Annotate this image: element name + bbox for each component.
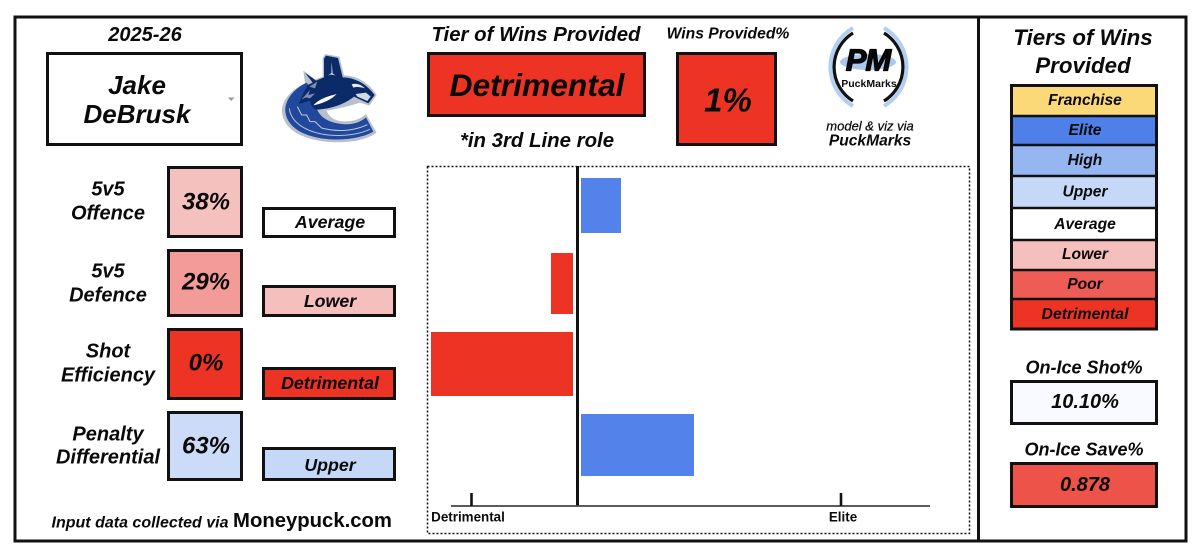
heading: tiers of wins provided: Tiers of Wins — [1013, 25, 1153, 50]
value axis — [451, 505, 930, 507]
metric row: shot efficiency — [61, 330, 394, 398]
credit: model and viz — [826, 118, 914, 150]
bar: shot efficiency — [431, 332, 573, 396]
metric row: penalty differential: Upper — [304, 455, 357, 475]
metric row: shot efficiency: Detrimental — [281, 373, 380, 393]
tier badge: detrimental: Detrimental — [450, 67, 626, 103]
title: tier of wins provided: Tier of Wins Provided — [431, 24, 641, 46]
player selector: DeBrusk — [84, 99, 192, 129]
bar: 5v5 offence — [581, 178, 621, 233]
legend: tiers: Detrimental — [1042, 306, 1129, 323]
metric row: 5v5 offence — [71, 168, 394, 236]
metric row: 5v5 defence: Defence — [69, 284, 147, 306]
legend: tiers: High — [1068, 152, 1102, 169]
icon: PuckMarks logo — [830, 28, 907, 106]
metric row: 5v5 defence — [69, 250, 394, 316]
credit: model and viz: PuckMarks — [829, 132, 911, 150]
bar: penalty differential — [581, 414, 694, 476]
heading: tiers of wins provided — [1013, 25, 1153, 78]
title: wins provided percent: Wins Provided% — [667, 26, 789, 42]
metric row: penalty differential — [56, 412, 394, 480]
stat: on-ice save percent — [1012, 440, 1156, 506]
metric row: 5v5 defence: 29% — [181, 268, 230, 296]
legend: tiers: Average — [1053, 216, 1116, 233]
metric row: penalty differential: Differential — [56, 446, 160, 468]
credit: model and viz: model & viz via — [826, 118, 914, 134]
value badge: wins provided percent — [678, 54, 776, 144]
stat: on-ice shot percent — [1012, 358, 1156, 424]
bar chart: wins provided components — [428, 166, 970, 534]
role note: *in 3rd Line role — [460, 130, 614, 152]
data source note: Moneypuck.com — [233, 510, 392, 532]
legend: tiers: Franchise — [1048, 92, 1122, 109]
icon: PuckMarks logo: PM — [846, 42, 892, 78]
metric row: penalty differential: 63% — [182, 432, 230, 460]
axis tick: elite — [840, 493, 842, 506]
legend: tiers — [1012, 86, 1156, 329]
tier badge: detrimental — [428, 54, 644, 116]
metric row: 5v5 offence: Average — [294, 212, 365, 232]
axis label: elite: Elite — [829, 510, 857, 524]
stat: on-ice shot percent: On-Ice Shot% — [1025, 358, 1143, 378]
metric row: 5v5 defence: Lower — [304, 291, 357, 311]
season label: 2025-26 — [107, 24, 183, 46]
legend: tiers: Poor — [1067, 276, 1104, 293]
icon: Vancouver Canucks logo — [282, 54, 377, 142]
data source note: Input data collected via — [52, 514, 229, 532]
metric row: shot efficiency: Shot — [86, 340, 132, 362]
data source note — [52, 510, 392, 532]
axis label: detrimental: Detrimental — [431, 510, 505, 524]
metric row: penalty differential: Penalty — [72, 424, 144, 446]
legend: tiers: Upper — [1062, 184, 1108, 200]
bar: 5v5 defence — [551, 253, 573, 314]
legend: tiers: Lower — [1062, 246, 1109, 263]
stat: on-ice save percent: 0.878 — [1060, 474, 1111, 496]
zero axis — [576, 166, 579, 506]
metric row: 5v5 offence: Offence — [71, 202, 145, 224]
player selector: Jake — [108, 70, 166, 100]
heading: tiers of wins provided: Provided — [1035, 53, 1131, 78]
metric row: 5v5 defence: 5v5 — [91, 260, 126, 282]
metric row: 5v5 offence: 5v5 — [91, 178, 126, 200]
stat: on-ice save percent: On-Ice Save% — [1024, 440, 1144, 460]
axis tick: detrimental — [470, 493, 473, 506]
legend: tiers: Elite — [1069, 122, 1102, 139]
metric row: shot efficiency: Efficiency — [61, 364, 156, 386]
metric row: shot efficiency: 0% — [189, 350, 223, 376]
icon: PuckMarks logo: PuckMarks — [841, 78, 897, 90]
metric row: 5v5 offence: 38% — [182, 188, 230, 216]
player selector — [48, 54, 242, 144]
value badge: wins provided percent: 1% — [704, 82, 752, 118]
stat: on-ice shot percent: 10.10% — [1051, 391, 1119, 413]
